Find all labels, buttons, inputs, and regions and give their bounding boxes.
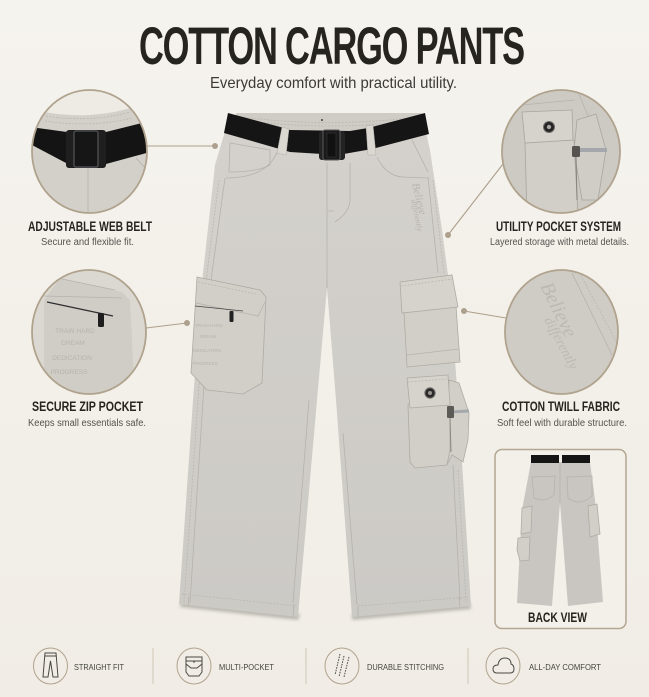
caption: Layered storage with metal details. bbox=[490, 237, 629, 248]
detail circle: fabric bbox=[503, 268, 621, 396]
embroidered script: Believe bbox=[409, 182, 429, 216]
belt loops bbox=[277, 125, 376, 155]
left cargo pocket: PROGRESS bbox=[192, 361, 218, 366]
caption: Soft feel with durable structure. bbox=[497, 418, 627, 429]
web belt bbox=[224, 113, 429, 155]
feature: durable stitching bbox=[325, 648, 444, 684]
caption: Keeps small essentials safe. bbox=[28, 418, 146, 429]
icon: cloud bbox=[486, 648, 520, 684]
left cargo pocket: TRAIN HARD bbox=[195, 323, 223, 328]
main product: front view of cargo pants bbox=[179, 113, 471, 620]
belt buckle bbox=[319, 130, 345, 160]
right lower cargo pocket with eyelet and zip bbox=[407, 375, 469, 468]
fly bbox=[327, 163, 350, 288]
feature: multi-pocket bbox=[177, 648, 274, 684]
detail circle: zip pocket: PROGRESS bbox=[51, 369, 88, 376]
heading: SECURE ZIP POCKET bbox=[32, 399, 144, 414]
label: STRAIGHT FIT bbox=[74, 662, 124, 672]
detail circle: zip pocket: DREAM bbox=[61, 340, 85, 347]
detail circle: belt buckle bbox=[30, 88, 150, 216]
detail circle: fabric: Believe bbox=[536, 279, 581, 341]
label: ALL-DAY COMFORT bbox=[529, 662, 601, 672]
pants body bbox=[179, 128, 471, 617]
leader line to fabric bbox=[461, 308, 506, 318]
hems bbox=[182, 594, 468, 606]
leader line to pocket bbox=[445, 164, 503, 238]
icon: pocket bbox=[177, 648, 211, 684]
right upper cargo pocket bbox=[400, 275, 460, 367]
title: COTTON CARGO PANTS bbox=[139, 18, 525, 76]
panel: back view bbox=[495, 450, 626, 628]
detail circle: fabric: differently bbox=[540, 315, 581, 373]
leader line to pocket bbox=[146, 320, 190, 328]
leader line to belt bbox=[147, 143, 218, 149]
left cargo pocket: DREAM bbox=[200, 334, 216, 339]
detail circle: utility pocket bbox=[500, 88, 622, 216]
label: DURABLE STITCHING bbox=[367, 662, 444, 672]
label: BACK VIEW bbox=[528, 610, 587, 625]
hem shadow bbox=[180, 602, 471, 620]
left cargo pocket bbox=[191, 277, 266, 394]
main product: front view of cargo pants: differently bbox=[409, 199, 425, 233]
callout: utility pocket system bbox=[445, 88, 629, 248]
left cargo pocket: DEDICATION bbox=[193, 348, 221, 353]
callout: secure zip pocket bbox=[28, 268, 190, 429]
label: MULTI-POCKET bbox=[219, 662, 274, 672]
caption: Secure and flexible fit. bbox=[41, 237, 134, 248]
waistband elastic bbox=[236, 113, 422, 134]
icon: stitches bbox=[325, 648, 359, 684]
detail circle: zip pocket bbox=[30, 268, 150, 400]
coin and slant pockets bbox=[229, 143, 270, 172]
callout: cotton twill fabric bbox=[461, 268, 627, 429]
detail circle: zip pocket: DEDICATION bbox=[52, 355, 92, 362]
subtitle: Everyday comfort with practical utility. bbox=[210, 75, 457, 92]
leg seams bbox=[190, 178, 225, 603]
back view pants bbox=[517, 455, 603, 606]
callout: adjustable web belt bbox=[28, 88, 218, 248]
heading: ADJUSTABLE WEB BELT bbox=[28, 219, 153, 234]
feature: all-day comfort bbox=[486, 648, 601, 684]
icon: trousers bbox=[34, 648, 68, 684]
feature: straight fit bbox=[34, 648, 124, 684]
detail circle: zip pocket: TRAIN HARD bbox=[55, 328, 95, 335]
